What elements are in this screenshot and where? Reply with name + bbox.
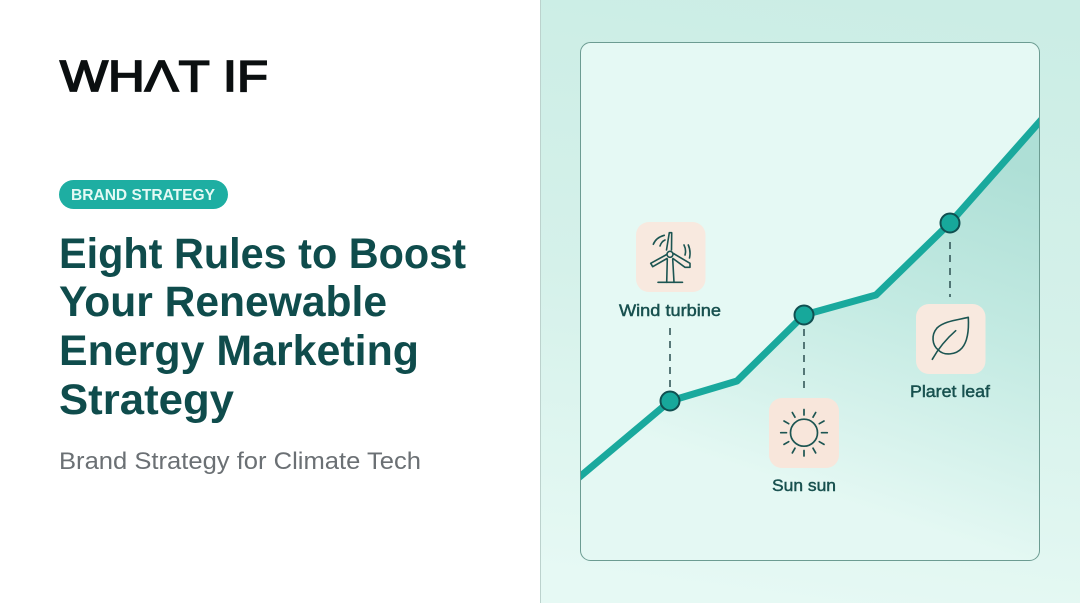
logo: WHAT IF: WHΛT IF (60, 52, 268, 101)
icon: leaf (916, 304, 986, 374)
title (59, 231, 466, 424)
chart line (570, 110, 1050, 485)
panel: left white background (0, 0, 540, 603)
label: sun: Sun sun (772, 477, 836, 495)
chart area fill (580, 121, 1040, 560)
badge: brand strategy (59, 180, 228, 209)
badge: brand strategy: BRAND STRATEGY (71, 187, 215, 204)
data point: leaf (940, 214, 960, 232)
connector: sun (803, 329, 805, 390)
label: wind turbine: Wind turbine (619, 302, 721, 320)
card border (580, 42, 1040, 560)
chart card (570, 42, 1050, 560)
data point: sun (794, 306, 814, 324)
label: leaf: Plaret leaf (910, 383, 990, 401)
title: Strategy (59, 377, 234, 424)
icon: sun (769, 398, 839, 468)
icon: wind turbine (636, 222, 706, 292)
connector: leaf (949, 242, 951, 297)
title: Your Renewable (59, 279, 387, 326)
title: Energy Marketing (59, 328, 419, 375)
title: Eight Rules to Boost (59, 231, 466, 278)
data point: wind turbine (660, 392, 680, 410)
connector: wind turbine (669, 328, 671, 390)
subtitle: Brand Strategy for Climate Tech (59, 448, 421, 475)
panel: right teal background (540, 0, 1080, 603)
